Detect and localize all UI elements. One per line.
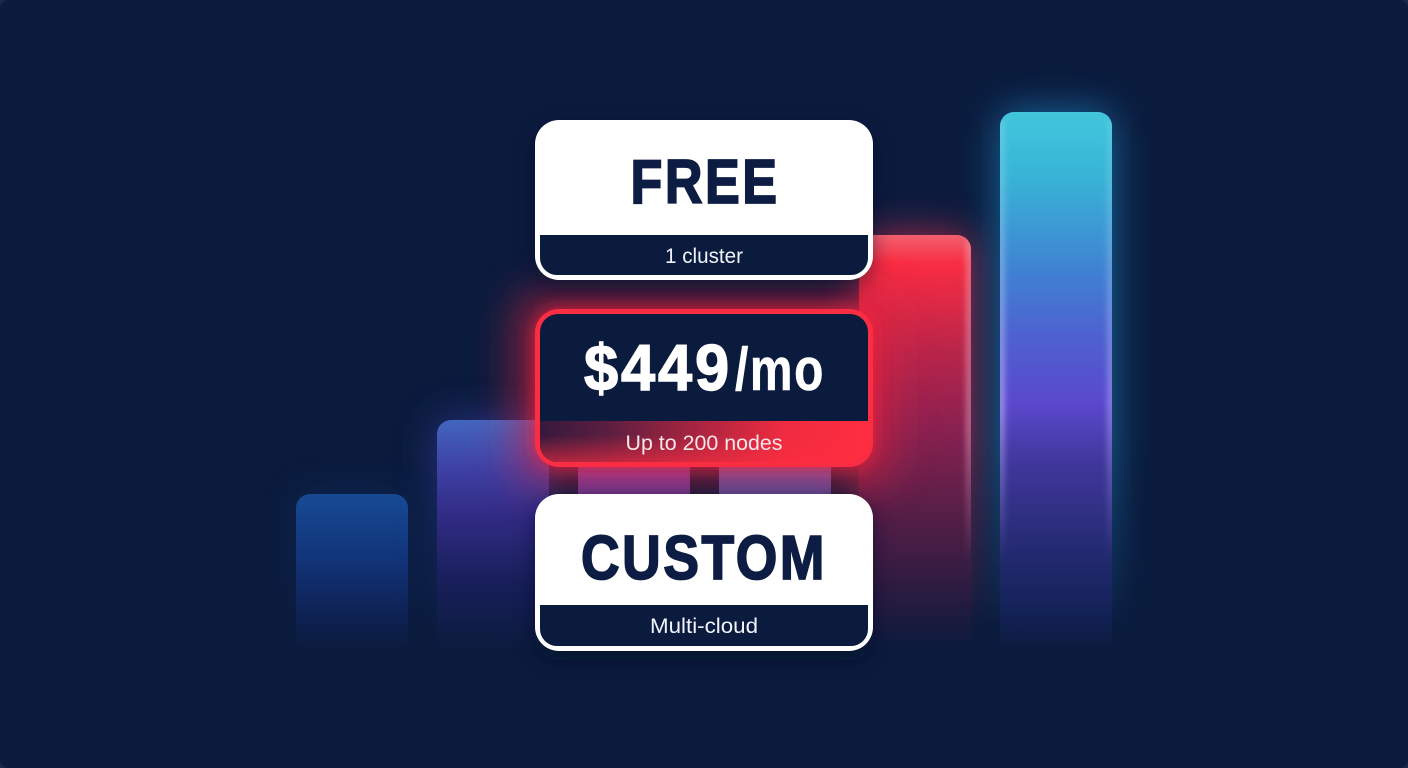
card: paid tier bbox=[512, 290, 896, 486]
custom footer strip bbox=[540, 605, 868, 646]
card: free tier bbox=[535, 120, 873, 288]
paid footer strip bbox=[540, 421, 868, 462]
card: custom tier bbox=[535, 494, 873, 660]
bar chart bbox=[296, 112, 1115, 655]
bar 6 bbox=[997, 112, 1115, 652]
custom subtitle: Multi-cloud bbox=[650, 615, 758, 638]
paid price bbox=[584, 331, 825, 404]
custom title: CUSTOM bbox=[581, 524, 827, 593]
free title: FREE bbox=[630, 148, 780, 217]
free footer strip bbox=[540, 235, 868, 275]
free subtitle: 1 cluster bbox=[665, 245, 743, 268]
paid price: $449 bbox=[584, 331, 732, 404]
bar 4 bbox=[719, 330, 831, 655]
bar 3 bbox=[578, 360, 690, 655]
paid subtitle: Up to 200 nodes bbox=[626, 432, 782, 455]
paid price: /mo bbox=[735, 336, 825, 403]
bar 2 bbox=[437, 420, 549, 650]
bar 5 bbox=[859, 235, 973, 648]
bar 1 bbox=[296, 494, 408, 650]
